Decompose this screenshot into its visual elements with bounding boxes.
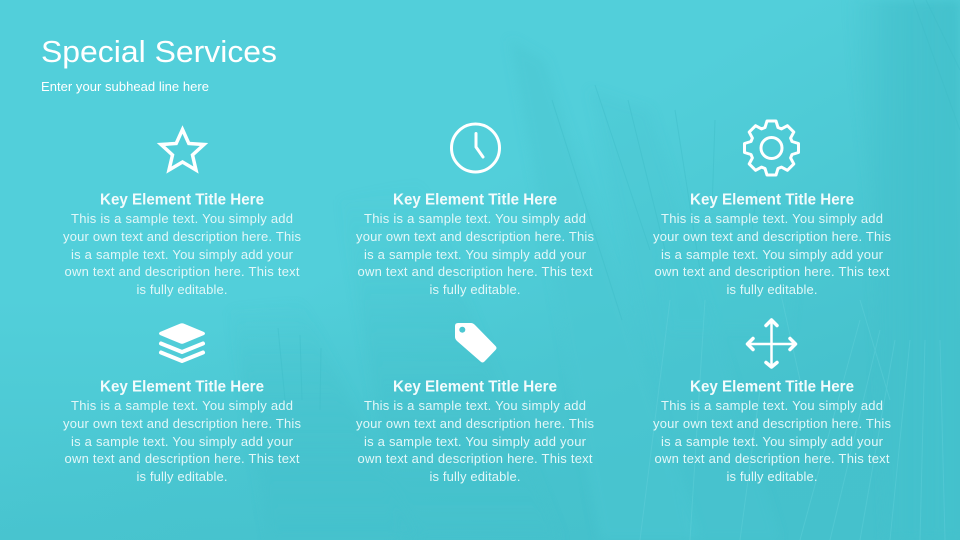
text block: tag service: your own text and description here. This [356,416,594,431]
text block: star service: is fully editable. [136,282,228,297]
text block: gear service: is fully editable. [726,282,818,297]
text block: tag service: is a sample text. You simply add your [364,434,587,449]
text block: gear service [653,211,892,297]
panel: layers service [63,323,302,484]
text block: star service [63,211,302,297]
text block: move service [653,398,892,484]
title: Special Services [41,34,277,69]
text block: tag service [356,398,594,484]
text block: layers service: is fully editable. [136,469,228,484]
text block: layers service: is a sample text. You simply add your [71,434,294,449]
text block: gear service: your own text and description here. This [653,229,892,244]
text block: tag service: This is a sample text. You simply add [364,398,586,413]
heading: clock service: Key Element Title Here [393,192,557,208]
text block: star service: your own text and description here. This [63,229,302,244]
text block: layers service [63,398,302,484]
text block: star service: own text and description here. This text [64,264,300,279]
heading: gear service: Key Element Title Here [690,192,854,208]
text block: clock service: is fully editable. [430,282,520,297]
panel: gear service [653,121,892,297]
text block: layers service: own text and description here. This text [64,451,300,466]
heading: tag service: Key Element Title Here [393,378,557,396]
icon: star [161,130,204,170]
text block: clock service: own text and description here. This text [358,264,593,279]
icon: layers [159,323,205,361]
icon: clock [452,124,500,172]
heading: layers service: Key Element Title Here [100,378,264,396]
panel: tag service [356,323,594,484]
text block: layers service: This is a sample text. You simply add [71,398,293,413]
text block: tag service: own text and description here. This text [358,451,593,466]
text block: move service: own text and description here. This text [654,451,890,466]
text block: clock service [356,211,594,297]
text block: gear service: own text and description here. This text [654,264,890,279]
heading: star service: Key Element Title Here [100,192,264,208]
text block: clock service: This is a sample text. You simply add [364,211,586,226]
text block: star service: is a sample text. You simply add your [71,247,294,262]
panel: move service [653,320,892,484]
text block: clock service: is a sample text. You simply add your [364,247,587,262]
text block: layers service: your own text and description here. This [63,416,302,431]
panel: clock service [356,124,594,297]
heading: move service: Key Element Title Here [690,378,854,396]
panel: star service [63,130,302,297]
icon: four-way arrows [748,320,796,367]
text block: move service: This is a sample text. You simply add [661,398,883,413]
text block: gear service: is a sample text. You simply add your [661,247,884,262]
text block: gear service: This is a sample text. You simply add [661,211,883,226]
text block: star service: This is a sample text. You simply add [71,211,293,226]
text block: move service: is fully editable. [726,469,818,484]
icon: gear [744,121,798,175]
text block: tag service: is fully editable. [430,469,520,484]
text block: clock service: your own text and description here. This [356,229,594,244]
text block: move service: is a sample text. You simply add your [661,434,884,449]
subhead: Enter your subhead line here [41,79,209,94]
text block: move service: your own text and description here. This [653,416,892,431]
icon: price tag [455,323,496,362]
